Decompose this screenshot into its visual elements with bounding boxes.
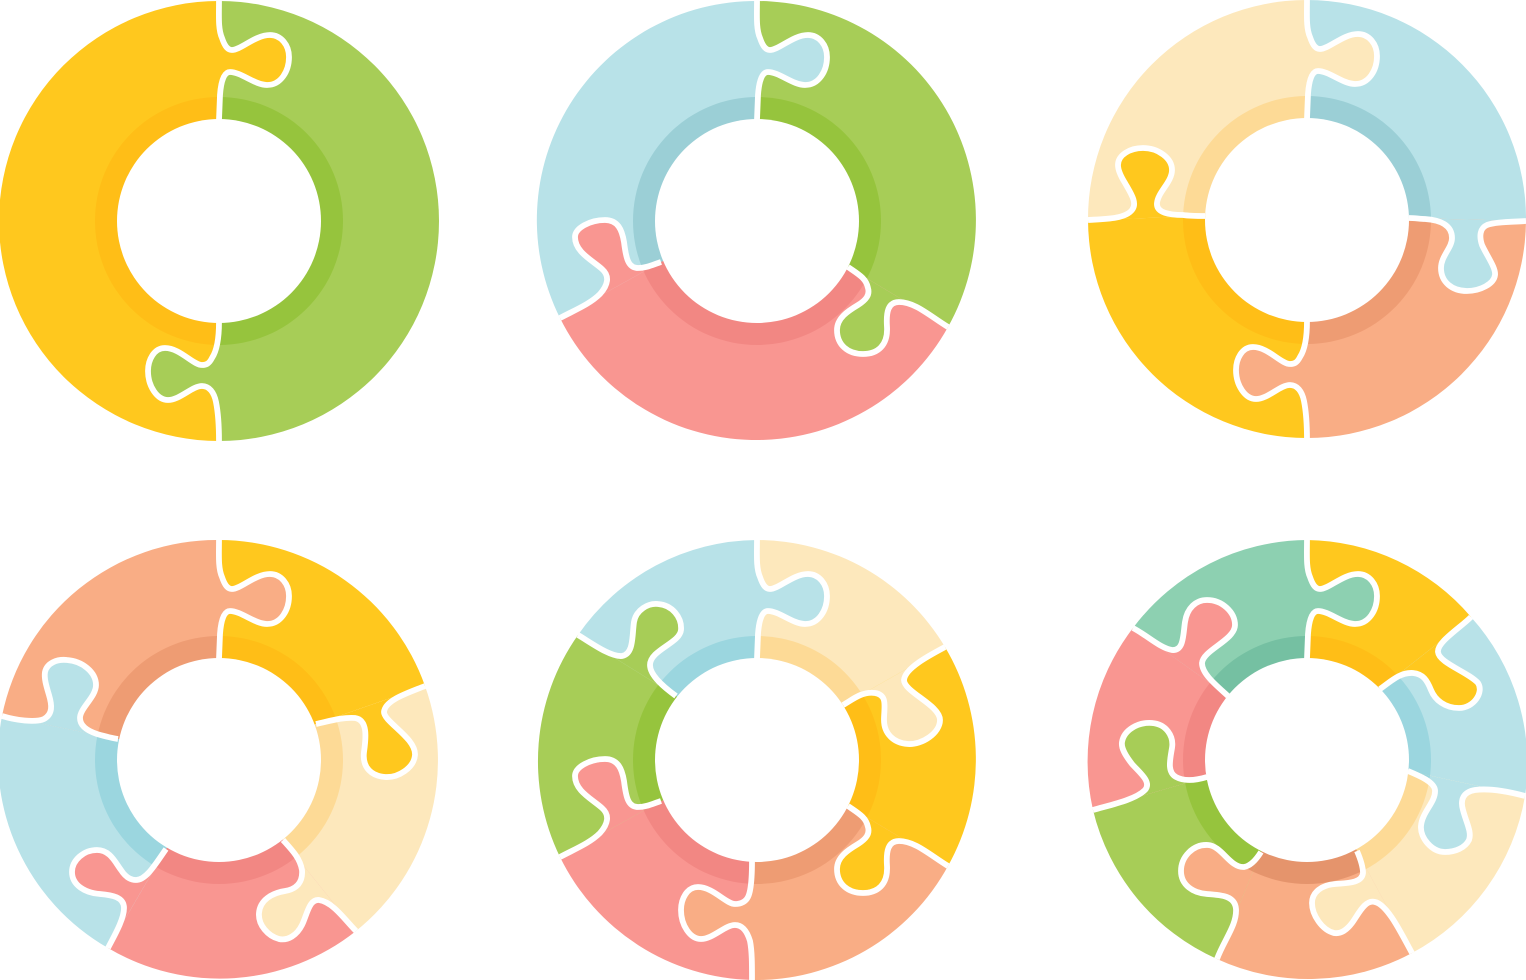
piece: green — [219, 1, 439, 441]
panel: seven-piece puzzle donut — [1088, 540, 1526, 979]
joint: yellow tab into cream — [1088, 148, 1205, 220]
joint: blue tab into cream — [757, 540, 827, 659]
joint: yellow tab into blue — [1380, 617, 1480, 708]
panel: two-piece puzzle donut — [0, 1, 439, 441]
joint: blue tab into cream — [1408, 771, 1525, 852]
joint: yellow tab into orange — [837, 806, 948, 893]
joint: red tab into green — [560, 759, 661, 857]
piece: blue — [1307, 0, 1526, 221]
joint: yellow tab into green — [219, 1, 289, 120]
piece: red — [560, 800, 750, 980]
piece: cream — [760, 540, 945, 705]
piece: orange — [1307, 218, 1526, 438]
joint: blue tab into orange — [2, 660, 118, 739]
center hole — [117, 658, 321, 862]
panel: four-piece puzzle donut — [1088, 0, 1526, 440]
piece: blue — [1307, 617, 1526, 796]
joint: green tab into red — [1093, 723, 1207, 810]
piece: teal — [1133, 540, 1307, 694]
piece: green — [538, 635, 677, 857]
piece: yellow — [0, 1, 219, 441]
joint: green tab into yellow — [148, 322, 219, 441]
joint: green tab into blue — [578, 604, 681, 696]
joint: blue tab into orange — [1409, 218, 1526, 291]
joint: green tab into red — [837, 267, 948, 354]
joint: cream tab into yellow — [843, 647, 945, 744]
joint: cream tab into orange — [1312, 851, 1412, 953]
joint: yellow tab into cream — [316, 686, 425, 777]
joint: orange tab into red — [681, 861, 752, 980]
piece: red — [1088, 628, 1307, 810]
piece: cream — [283, 686, 438, 931]
piece: yellow — [1307, 540, 1471, 760]
joint: blue tab into green — [757, 1, 827, 120]
joint: teal tab into yellow — [1307, 540, 1377, 659]
joint: cream tab into red — [259, 840, 356, 939]
panel: three-piece puzzle donut — [537, 1, 976, 440]
piece: green — [757, 1, 976, 327]
piece: cream — [1307, 760, 1525, 953]
center hole — [655, 658, 859, 862]
piece: red — [560, 261, 948, 440]
piece: orange — [2, 540, 219, 760]
piece: orange — [752, 806, 948, 980]
joint: red tab into blue — [560, 220, 661, 318]
piece: blue — [0, 716, 167, 948]
piece: green — [1093, 760, 1307, 959]
piece: yellow — [222, 540, 425, 724]
center hole — [117, 119, 321, 323]
joint: cream tab into blue — [1307, 0, 1377, 119]
piece: orange — [1217, 760, 1412, 979]
joint: orange tab into green — [1181, 845, 1261, 959]
piece: blue — [537, 1, 757, 318]
piece: yellow — [842, 647, 976, 866]
joint: orange tab into yellow — [1236, 321, 1307, 440]
piece: yellow — [1088, 216, 1307, 438]
panel: five-piece puzzle donut — [0, 540, 438, 979]
piece: blue — [578, 540, 757, 696]
center hole — [1205, 658, 1409, 862]
piece: red — [108, 840, 356, 979]
joint: red tab into teal — [1133, 600, 1235, 696]
center hole — [655, 119, 859, 323]
center hole — [1205, 118, 1409, 322]
joint: red tab into blue — [72, 849, 166, 948]
panel: six-piece puzzle donut — [538, 540, 976, 980]
joint: orange tab into yellow — [219, 540, 289, 659]
piece: cream — [1088, 0, 1307, 220]
